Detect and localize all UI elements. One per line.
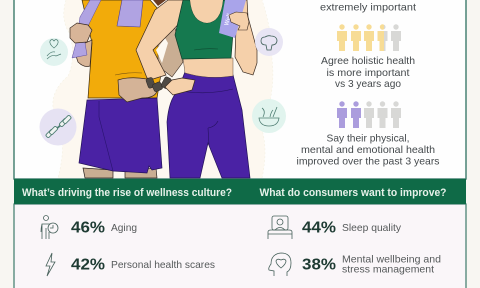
stat: 42 percent health scares: Personal health scares — [111, 259, 215, 271]
icon: heart in hand — [40, 38, 68, 66]
text: say their health improved: improved over the past 3 years — [296, 156, 440, 168]
man shorts — [79, 98, 162, 173]
man raised hand — [70, 23, 92, 43]
illustration: man — [70, 0, 183, 178]
text: agree holistic health: Agree holistic health — [321, 55, 415, 67]
panel: illustration and statistics — [14, 0, 466, 179]
stat: 44 percent sleep quality — [302, 220, 402, 237]
icon: head with heart — [269, 253, 291, 276]
text: extremely important: extremely important — [320, 2, 416, 14]
panel: what consumers want to improve — [240, 179, 466, 276]
woman chest — [190, 0, 223, 23]
text: agree holistic health: is more important — [326, 67, 410, 79]
hand on bottle — [229, 12, 249, 30]
text: say their health improved — [296, 132, 440, 168]
illustration: woman — [136, 0, 257, 178]
woman pants — [167, 72, 250, 178]
stat: 44 percent sleep quality: Sleep quality — [342, 222, 402, 234]
heading band: improve — [240, 179, 466, 204]
stat: 42 percent health scares: 42% — [71, 256, 105, 273]
icon: lightning bolt — [46, 253, 55, 276]
man hand on hip — [118, 78, 157, 102]
stat: 44 percent sleep quality: 44% — [302, 220, 336, 237]
heading band: driving — [14, 179, 240, 204]
pictogram: improved health people — [337, 101, 401, 128]
icon: sleep — [268, 216, 292, 239]
towel around neck — [117, 0, 143, 27]
woman hand on hip — [165, 78, 195, 95]
panel: what is driving wellness culture — [14, 179, 240, 276]
water bottle: Well — [224, 13, 233, 27]
text: agree holistic health — [321, 55, 415, 90]
heading band: improve: What do consumers want to improve? — [260, 187, 447, 199]
panel: lower statistics background — [14, 204, 466, 288]
woman midriff — [183, 58, 233, 77]
text: say their health improved: mental and emotional health — [301, 144, 435, 156]
pictogram: holistic health people — [337, 24, 401, 51]
towel in hand — [72, 0, 101, 58]
icon: person with clock — [41, 216, 58, 239]
stat: 38 percent mental wellbeing: stress management — [342, 264, 434, 276]
woman left arm — [136, 0, 185, 79]
water bottle — [219, 0, 246, 38]
man legs — [83, 168, 157, 178]
heading band: driving: What’s driving the rise of wellness culture? — [22, 187, 232, 199]
icon: broccoli — [255, 28, 283, 56]
icon: dumbbell — [40, 108, 76, 146]
woman bracelets — [145, 76, 172, 92]
woman top — [175, 0, 233, 59]
stat: 38 percent mental wellbeing: Mental wellbeing and — [342, 254, 441, 266]
stat: 46 percent aging — [71, 220, 137, 237]
stat: 42 percent health scares — [71, 256, 215, 273]
stat: 46 percent aging: 46% — [71, 220, 105, 237]
woman right arm — [235, 0, 257, 75]
man hair — [153, 0, 166, 6]
stat: 38 percent mental wellbeing: 38% — [302, 256, 336, 273]
text: agree holistic health: vs 3 years ago — [335, 78, 401, 90]
man shirt — [82, 0, 165, 98]
stat: 38 percent mental wellbeing — [302, 254, 441, 276]
stat: 46 percent aging: Aging — [111, 222, 137, 234]
man raised arm — [76, 40, 92, 66]
text: say their health improved: Say their physical, — [326, 132, 410, 144]
man tan forearm — [158, 28, 183, 77]
icon: bowl — [252, 99, 286, 133]
